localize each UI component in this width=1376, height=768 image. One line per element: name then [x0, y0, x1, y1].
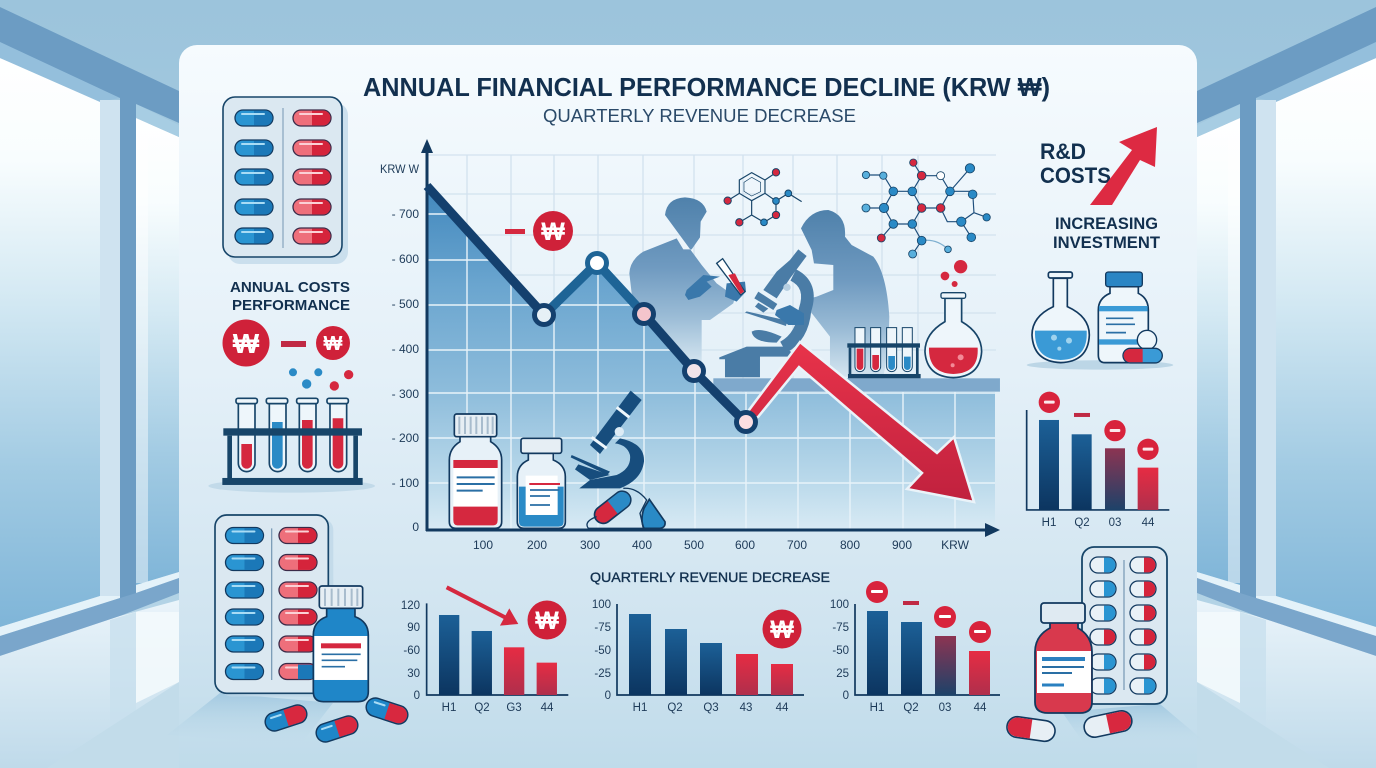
- bar chart bottom right: [830, 581, 1000, 714]
- bar chart bottom left: [401, 587, 568, 714]
- heading: R&D costs: [1040, 139, 1111, 188]
- bar chart bottom middle: -50: [594, 645, 611, 657]
- grid lower: [428, 213, 995, 528]
- x axis labels: 500: [684, 538, 704, 552]
- x axis labels: 100: [473, 538, 493, 552]
- lab bench: [713, 378, 1000, 392]
- heading: annual costs performance: [230, 279, 350, 314]
- x axis labels: 600: [735, 538, 755, 552]
- grid upper: [427, 155, 996, 392]
- bar chart right: Q2: [1074, 517, 1090, 529]
- scientists silhouettes: [629, 197, 889, 377]
- molecule large: [862, 159, 990, 258]
- blister pack: [1082, 547, 1167, 704]
- gloved hands and tube: [685, 259, 746, 302]
- x axis labels: 300: [580, 538, 600, 552]
- bar chart bottom left: 120: [401, 600, 420, 612]
- icon: won minus won: ₩: [324, 333, 343, 355]
- bar chart right: H1: [1042, 517, 1056, 529]
- pack shadow: [1062, 704, 1205, 745]
- heading: increasing investment: INVESTMENT: [1053, 233, 1161, 252]
- heading: increasing investment: INCREASING: [1055, 214, 1158, 233]
- y axis labels: [380, 164, 419, 534]
- icon: won minus won: [222, 320, 350, 366]
- chart area fill: [427, 182, 995, 530]
- x axis labels: 800: [840, 538, 860, 552]
- bar chart bottom middle: 43: [740, 702, 752, 714]
- y axis labels: KRW W: [380, 164, 419, 176]
- bar chart bottom right: H1: [870, 702, 884, 714]
- y axis labels: - 700: [392, 207, 419, 221]
- bottle blue: [517, 438, 565, 528]
- bar chart bottom middle: -75: [594, 622, 611, 634]
- scientist right: [801, 210, 889, 377]
- arrow: red rising: [1090, 127, 1157, 205]
- loose capsules: [263, 696, 410, 744]
- bottle: [313, 586, 368, 702]
- x axis labels: 200: [527, 538, 547, 552]
- main line chart: [380, 139, 1000, 552]
- icons: bottles and microscope: [449, 391, 665, 528]
- title: ANNUAL FINANCIAL PERFORMANCE DECLINE (KRW ₩): [363, 72, 1050, 102]
- red flask: [925, 260, 982, 378]
- pack shadow: [167, 693, 333, 745]
- subtitle: QUARTERLY REVENUE DECREASE: [543, 105, 856, 126]
- bar chart bottom middle: Q3: [703, 702, 719, 714]
- bar chart bottom right: 100: [830, 599, 849, 611]
- bar chart bottom middle: ₩: [770, 616, 794, 644]
- icon: blister pack top-left: [223, 97, 348, 264]
- heading: annual costs performance: ANNUAL COSTS: [230, 279, 350, 296]
- bar chart bottom left: 90: [407, 622, 420, 634]
- arrow: red decline: [748, 342, 974, 502]
- bar chart bottom right: Q2: [903, 702, 919, 714]
- x axis labels: [473, 538, 970, 552]
- y axis labels: - 300: [392, 387, 419, 401]
- bar chart bottom left: ₩: [535, 607, 559, 635]
- y axis labels: - 400: [392, 342, 419, 356]
- heading: R&D costs: COSTS: [1040, 163, 1111, 188]
- bottle: [1035, 603, 1092, 713]
- bar chart bottom left: 0: [414, 690, 420, 702]
- heading: quarterly revenue decrease lower: QUARTERLY REVENUE DECREASE: [590, 569, 830, 585]
- bar chart bottom left: 44: [541, 702, 554, 714]
- panel: left column top: [208, 97, 375, 493]
- microscope silhouette: [719, 249, 807, 377]
- panel: right column top: [1027, 127, 1173, 529]
- y axis labels: - 100: [392, 476, 419, 490]
- bottom right pack and bottle: [1006, 547, 1205, 745]
- y axis labels: - 200: [392, 431, 419, 445]
- bar chart bottom left: -60: [403, 645, 420, 657]
- x axis labels: 400: [632, 538, 652, 552]
- bar chart bottom right: 03: [939, 702, 951, 714]
- bar chart bottom right: 44: [974, 702, 987, 714]
- heading: annual costs performance: PERFORMANCE: [232, 297, 350, 314]
- bar chart right: 44: [1142, 517, 1155, 529]
- icons: flask and bottle: [1027, 272, 1173, 370]
- bar chart bottom middle: 100: [592, 599, 611, 611]
- bar chart right: 03: [1109, 517, 1121, 529]
- line series decline: [427, 186, 758, 434]
- icon: minus won badge: ₩: [541, 218, 565, 246]
- icon: minus won badge: [505, 211, 573, 251]
- bar chart bottom left: Q2: [474, 702, 490, 714]
- scene: lab props: [685, 159, 1000, 392]
- bottle red: [449, 414, 502, 528]
- microscope: [571, 391, 644, 488]
- bar chart bottom middle: [592, 599, 804, 714]
- axes: [421, 139, 1000, 537]
- bar chart bottom right: 0: [843, 690, 849, 702]
- bar chart bottom middle: 0: [605, 690, 611, 702]
- heading: increasing investment: [1053, 214, 1161, 252]
- x axis labels: 700: [787, 538, 807, 552]
- blister pack: [215, 515, 333, 697]
- capsules: [587, 488, 665, 528]
- bar chart bottom right: -50: [832, 645, 849, 657]
- bar chart right: [1027, 392, 1169, 529]
- bottom left pack and bottle: [167, 515, 410, 745]
- y axis labels: 0: [412, 520, 419, 534]
- bar chart bottom middle: H1: [633, 702, 647, 714]
- bar chart bottom middle: Q2: [667, 702, 683, 714]
- y axis labels: - 500: [392, 297, 419, 311]
- molecule small: [724, 169, 802, 226]
- bar chart bottom left: G3: [506, 702, 522, 714]
- x axis labels: 900: [892, 538, 912, 552]
- bar chart bottom middle: 44: [776, 702, 789, 714]
- test tube rack small: [847, 328, 921, 378]
- loose capsules: [1006, 709, 1134, 743]
- heading: R&D costs: R&D: [1040, 139, 1086, 164]
- bar chart bottom right: 25: [836, 668, 849, 680]
- bar chart bottom right: -75: [832, 622, 849, 634]
- bar chart bottom left: H1: [442, 702, 456, 714]
- icon: test tube rack: [208, 368, 375, 493]
- icon: won minus won: ₩: [233, 328, 260, 359]
- y axis labels: - 600: [392, 252, 419, 266]
- panel: main: [179, 45, 1197, 768]
- bar chart bottom left: 30: [407, 668, 420, 680]
- scientist left: [629, 197, 735, 363]
- x axis labels: KRW: [941, 538, 970, 552]
- bar chart bottom middle: -25: [594, 668, 611, 680]
